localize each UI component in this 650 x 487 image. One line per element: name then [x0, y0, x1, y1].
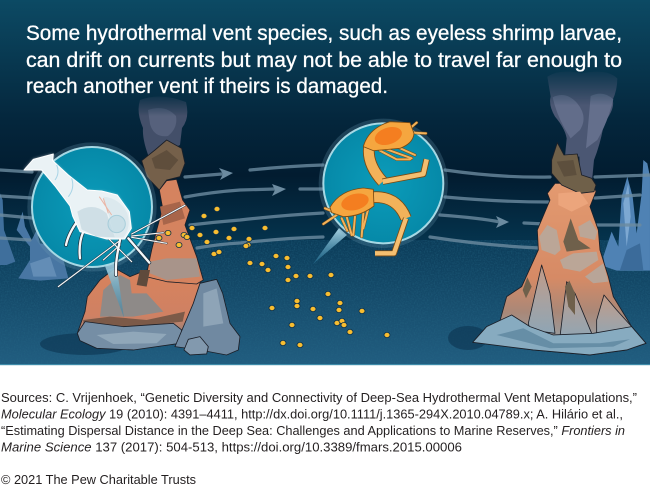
- lower peaks: [528, 265, 555, 333]
- copyright: © 2021 The Pew Charitable Trusts: [1, 472, 196, 487]
- orange chimney column: [146, 179, 203, 284]
- larva: upper: [363, 122, 427, 182]
- pale blue foot: [473, 315, 646, 355]
- current lines: [0, 165, 650, 248]
- shrimp glow: [24, 154, 131, 238]
- sources text block: Marine Science 137 (2017): 504-513, https://doi.org/10.3389/fmars.2015.00006: [1, 440, 462, 454]
- heading: [26, 21, 622, 98]
- larvae drifting: yellow dots: [156, 206, 390, 348]
- sources text block: “Estimating Dispersal Distance in the Deep Sea: Challenges and Applications to Marine Reserves,” Frontiers in: [1, 423, 625, 438]
- gray foot: [77, 322, 182, 350]
- brown cap: [552, 143, 596, 193]
- callout pointer: larvae to dots: [313, 228, 347, 264]
- brown cap: [142, 140, 185, 190]
- hydrothermal vent: right: [473, 143, 646, 355]
- panel: deep sea scene background: [0, 0, 650, 365]
- heading: can drift on currents but may not be able to travel far enough to: [26, 48, 622, 72]
- base mound: [77, 268, 203, 348]
- hydrothermal vent: left: [77, 140, 240, 355]
- smoke plume: right vent: [547, 71, 617, 185]
- tan lumps: [539, 225, 561, 255]
- heading: Some hydrothermal vent species, such as eyeless shrimp larvae,: [26, 21, 622, 45]
- surface patches: [150, 258, 200, 280]
- shrimp legs and antennae: [58, 205, 185, 287]
- sea floor shadows under vents: [40, 326, 488, 355]
- gray boulders: [175, 279, 240, 355]
- callout pointer: eyeless shrimp to vent: [105, 262, 124, 318]
- larva: lower: [323, 188, 406, 253]
- sources text block: Molecular Ecology 19 (2010): 4391–4411, http://dx.doi.org/10.1111/j.1365-294X.2010.04789.x; A. Hilário et al.,: [1, 406, 623, 422]
- smoke plume: left vent: [139, 96, 187, 160]
- sources text block: [1, 390, 637, 454]
- callout circle: shrimp larvae: [319, 119, 448, 253]
- chimney body: [473, 183, 646, 355]
- background chimneys: left: [0, 193, 68, 281]
- background chimneys: right: [603, 160, 650, 271]
- shrimp body: [24, 154, 131, 239]
- heading: reach another vent if theirs is damaged.: [26, 74, 388, 98]
- sources text block: Sources: C. Vrijenhoek, “Genetic Diversity and Connectivity of Deep-Sea Hydrothermal Vent Metapopulations,”: [1, 390, 637, 405]
- callout circle: adult eyeless shrimp: [24, 142, 185, 287]
- arrowheads: [219, 168, 509, 228]
